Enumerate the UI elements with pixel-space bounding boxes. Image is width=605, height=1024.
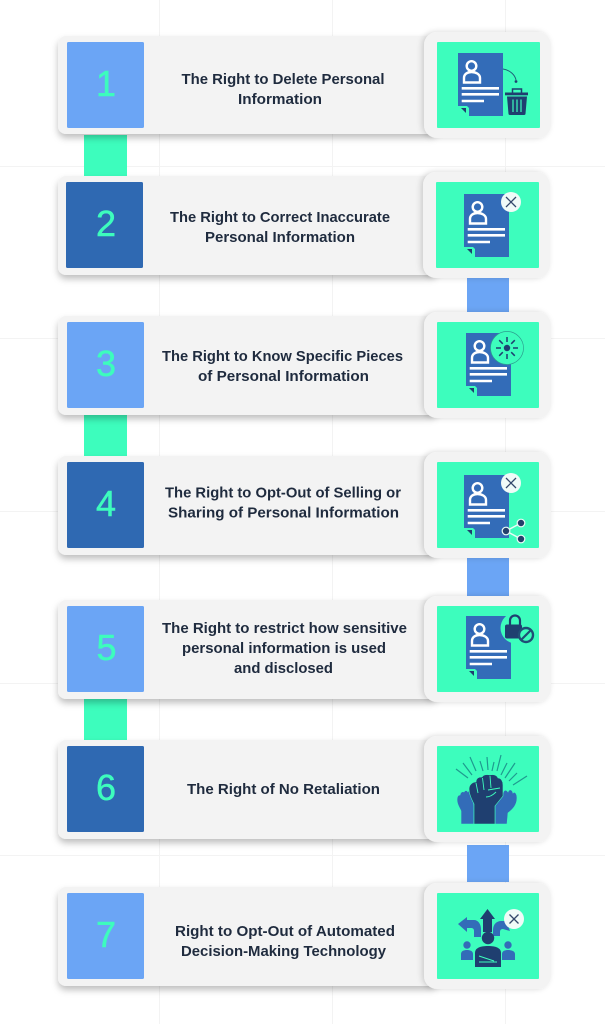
icon: document with lock and prohibition — [424, 596, 551, 702]
number 6: 6 — [96, 767, 116, 808]
text: right 2: The Right to Correct Inaccurate — [170, 209, 390, 226]
panel: right 7 — [58, 883, 551, 989]
text: right 5: and disclosed — [234, 660, 333, 677]
connector: blue 2-3 — [467, 278, 509, 312]
panel: right 3 — [58, 312, 551, 418]
text: right 1: Information — [238, 91, 322, 108]
number 5 — [67, 606, 144, 692]
number 3 — [67, 322, 144, 408]
text: right 5: personal information is used — [182, 640, 386, 657]
number 7 — [67, 893, 144, 979]
text: right 1: The Right to Delete Personal — [182, 71, 384, 88]
connector: green 5-6 — [84, 699, 127, 740]
number 2: 2 — [96, 203, 116, 244]
panel: right 5 — [58, 596, 551, 702]
text: right 3: The Right to Know Specific Pieces — [162, 348, 403, 365]
connector: blue 6-7 — [467, 845, 509, 882]
connector: green 1-2 — [84, 135, 127, 176]
icon: document with x badge — [423, 172, 550, 278]
number 6 — [67, 746, 144, 832]
number 2 — [66, 182, 143, 268]
text: right 6: The Right of No Retaliation — [187, 781, 380, 798]
text: right 7: Right to Opt-Out of Automated — [175, 923, 395, 940]
panel: right 1 — [58, 32, 551, 138]
number 1 — [67, 42, 144, 128]
number 4: 4 — [96, 483, 116, 524]
number 7: 7 — [96, 914, 116, 955]
panel: right 4 — [58, 452, 551, 558]
text: right 2: Personal Information — [205, 229, 355, 246]
icon: document with sun badge — [424, 312, 551, 418]
icon: people and arrows with x badge — [424, 883, 551, 989]
text: right 3: of Personal Information — [198, 368, 369, 385]
text: right 5: The Right to restrict how sensitive — [162, 620, 407, 637]
text: right 4: Sharing of Personal Information — [168, 504, 399, 522]
panel: right 6 — [58, 736, 551, 842]
number 3: 3 — [96, 343, 116, 384]
icon: raised fists — [424, 736, 551, 842]
connector: green 3-4 — [84, 415, 127, 456]
number 1: 1 — [96, 63, 116, 104]
icon: document and trash can — [424, 32, 551, 138]
text: right 4: The Right to Opt-Out of Selling or — [165, 484, 401, 502]
number 5: 5 — [96, 627, 117, 668]
connector: blue 4-5 — [467, 558, 509, 596]
icon: document with x badge and share — [424, 452, 551, 558]
number 4 — [67, 462, 144, 548]
text: right 7: Decision-Making Technology — [181, 943, 387, 960]
panel: right 2 — [58, 172, 550, 278]
